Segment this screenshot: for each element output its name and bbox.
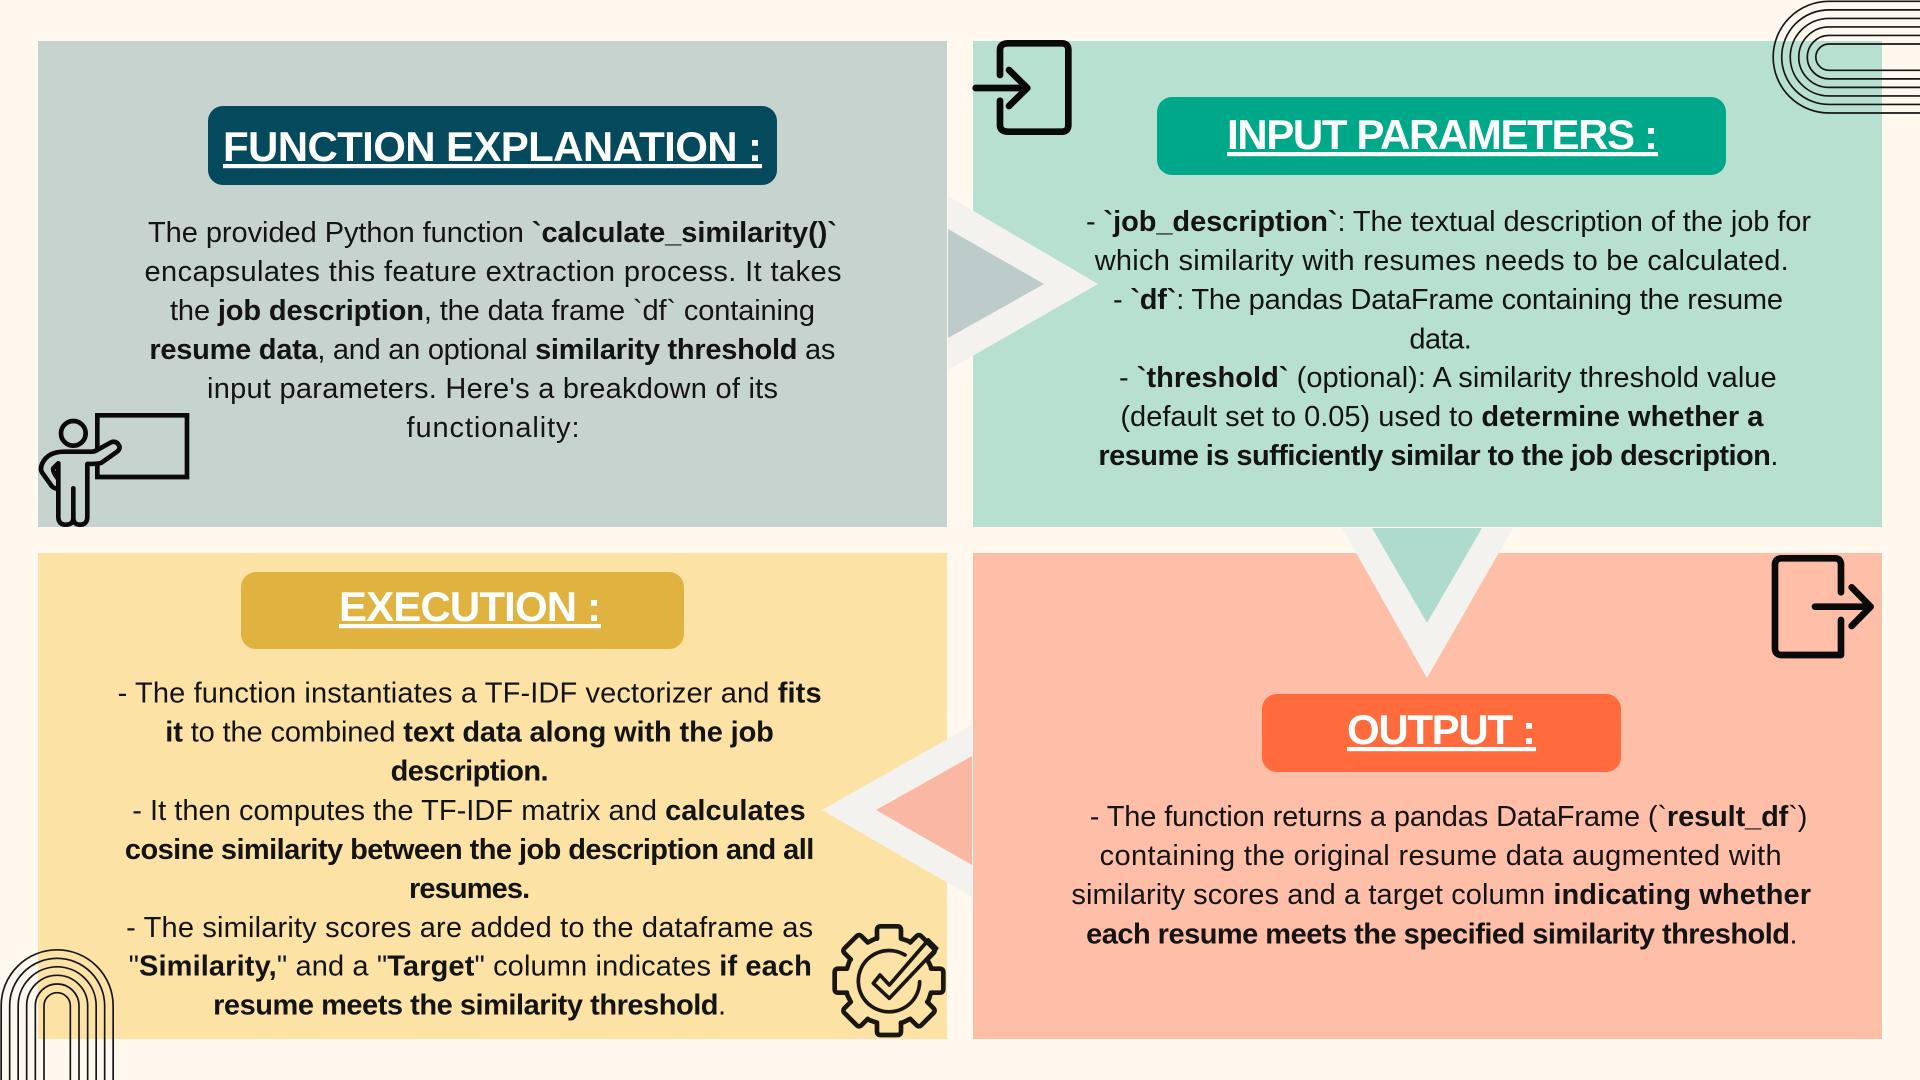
heading: input parameters: INPUT PARAMETERS : [1227, 111, 1658, 158]
text: execution body: - It then computes the TF-IDF matrix and calculates [132, 795, 806, 827]
panel: input parameters [973, 41, 1882, 527]
text: output body: - The function returns a pandas DataFrame (`result_df`) [1090, 801, 1807, 833]
heading: execution: EXECUTION : [339, 583, 601, 630]
text: execution body: it to the combined text data along with the job [165, 716, 774, 748]
text: input parameters body: data. [1409, 324, 1472, 356]
text: function explanation body: encapsulates this feature extraction process. It takes [144, 256, 842, 288]
text: execution body: cosine similarity between the job description and all [125, 834, 814, 866]
heading: function explanation [208, 106, 777, 185]
text: function explanation body: the job description, the data frame `df` containing [170, 295, 815, 327]
arrow: input to output [1342, 528, 1513, 678]
text: input parameters body: (default set to 0.05) used to determine whether a [1120, 401, 1764, 433]
text: output body: similarity scores and a target column indicating whether [1071, 879, 1811, 911]
text: function explanation body: The provided Python function `calculate_similarity()` [148, 217, 837, 249]
text: execution body: description. [391, 756, 549, 788]
heading: output [1262, 694, 1621, 772]
decoration: concentric lines top right [1773, 1, 1920, 113]
text: execution body: resumes. [409, 873, 530, 905]
text: input parameters body: - `df`: The pandas DataFrame containing the resume [1113, 284, 1783, 316]
text: input parameters body: which similarity with resumes needs to be calculated. [1094, 245, 1789, 277]
panel: output [973, 553, 1882, 1039]
text: function explanation body: functionality: [406, 412, 580, 444]
heading: output: OUTPUT : [1347, 706, 1536, 753]
panel: execution [38, 553, 947, 1039]
panel: function explanation [38, 41, 947, 527]
text: input parameters body: resume is sufficiently similar to the job description. [1098, 440, 1778, 472]
icon: logout arrow [1775, 558, 1871, 655]
text: output body [1071, 801, 1811, 950]
text: function explanation body: resume data, and an optional similarity threshold as [149, 334, 835, 366]
heading: input parameters [1157, 97, 1726, 175]
text: input parameters body: - `job_description`: The textual description of the job for [1086, 206, 1811, 238]
text: execution body: - The similarity scores are added to the dataframe as [126, 912, 813, 944]
arrow: output to execution [822, 725, 972, 897]
text: execution body: resume meets the similarity threshold. [213, 990, 726, 1022]
text: output body: containing the original resume data augmented with [1100, 840, 1782, 872]
text: input parameters body: - `threshold` (optional): A similarity threshold value [1119, 362, 1777, 394]
text: function explanation body [144, 217, 842, 444]
text: output body: each resume meets the specified similarity threshold. [1086, 918, 1798, 950]
arrow: function to input [948, 196, 1098, 370]
icon: login arrow [976, 43, 1068, 132]
heading: function explanation: FUNCTION EXPLANATION : [223, 123, 762, 170]
text: execution body: - The function instantiates a TF-IDF vectorizer and fits [118, 677, 822, 709]
text: function explanation body: input parameters. Here's a breakdown of its [207, 373, 778, 405]
icon: gear with check mark [835, 926, 943, 1035]
text: input parameters body [1086, 206, 1811, 472]
text: execution body [118, 677, 822, 1022]
decoration: concentric arches bottom left [1, 950, 113, 1080]
heading: execution [241, 572, 684, 649]
text: execution body: "Similarity," and a "Target" column indicates if each [129, 950, 812, 982]
icon: presenter at board [41, 415, 187, 525]
